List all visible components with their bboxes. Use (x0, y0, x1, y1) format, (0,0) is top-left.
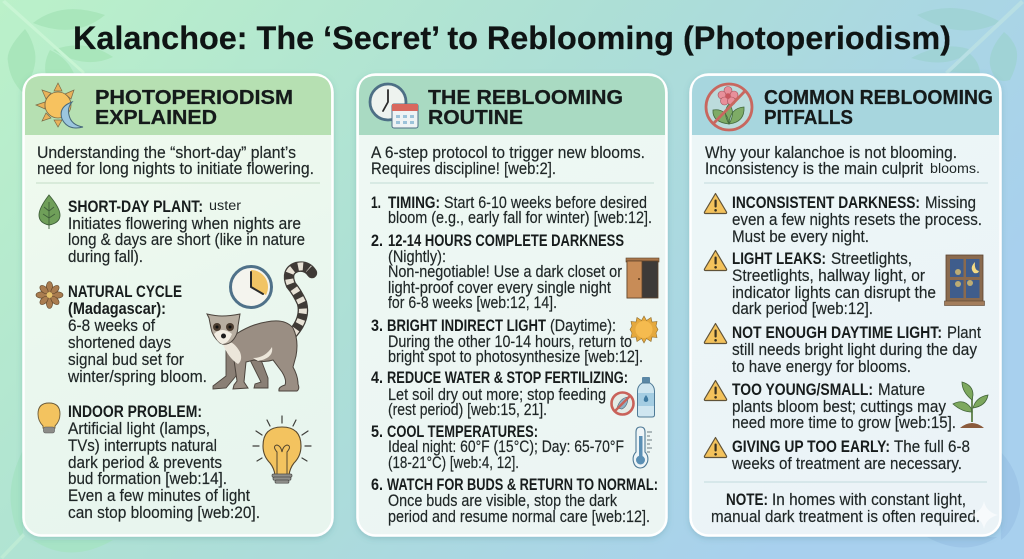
indoor problem text (68, 403, 260, 522)
icon: warning 5 (704, 438, 727, 458)
indoor problem text: Even a few minutes of light (68, 487, 250, 505)
step 4: Let soil dry out more; stop feeding (388, 386, 606, 404)
step 2: for 6-8 weeks [web:12, 14]. (388, 294, 557, 312)
natural cycle text: shortened days (68, 334, 171, 352)
step 3 (371, 317, 643, 366)
step 3: During the other 10-14 hours, return to (388, 333, 632, 351)
intro text: blooms. (930, 161, 980, 176)
pitfall: inconsistent darkness: Missing (925, 194, 976, 212)
pitfall: light leaks: dark period [web:12]. (732, 300, 873, 318)
step 1: bloom (e.g., early fall for winter) [web:12]. (388, 209, 652, 227)
intro text (705, 144, 980, 178)
step 6: 6. (371, 476, 383, 494)
icon: small light bulb (38, 403, 60, 433)
panel header band (25, 76, 331, 135)
short-day plant text (68, 198, 305, 266)
icon: leaf (39, 195, 60, 229)
sparkle mark (970, 501, 998, 529)
heading: PHOTOPERIODISM (95, 86, 293, 109)
pitfall: not enough daytime light: NOT ENOUGH DAYTIME LIGHT: (732, 324, 942, 342)
intro text: Inconsistency is the main culprit (705, 160, 923, 178)
step 5: 5. (371, 423, 383, 441)
heading (428, 86, 623, 129)
intro text (371, 144, 645, 178)
natural cycle text: signal bud set for (68, 351, 184, 369)
heading: ROUTINE (428, 106, 523, 129)
step 6 (371, 476, 658, 526)
pitfall: not enough daytime light: to have energy for blooms. (732, 358, 911, 376)
intro text: A 6-step protocol to trigger new blooms. (371, 144, 645, 162)
pitfall: too young or small: plants bloom best; cuttings may (732, 398, 947, 416)
intro text: Requires discipline! [web:2]. (371, 160, 556, 178)
pitfall: giving up too early (731, 438, 970, 473)
pitfall: too young or small (732, 381, 956, 432)
step 6: Once buds are visible, stop the dark (388, 492, 618, 510)
indoor problem text: TVs) interrupts natural (68, 437, 217, 455)
natural cycle text: winter/spring bloom. (67, 368, 207, 386)
heading (95, 86, 293, 129)
pitfall: inconsistent darkness: even a few nights resets the process. (732, 211, 982, 229)
short-day plant text: during fall). (68, 248, 143, 266)
icon: clock (230, 266, 272, 308)
pitfall: light leaks: indicator lights can disrupt the (732, 284, 936, 302)
note: NOTE: (726, 491, 768, 509)
icon: thermometer (633, 427, 652, 468)
step 3: BRIGHT INDIRECT LIGHT (387, 317, 546, 335)
indoor problem text: Artificial light (lamps, (68, 420, 210, 438)
icon: warning 1 (704, 194, 727, 214)
heading: COMMON REBLOOMING (764, 86, 993, 109)
panel header band (359, 76, 665, 135)
icon: large light bulb (253, 416, 311, 483)
pitfall: too young or small: Mature (878, 381, 925, 399)
panel: common reblooming pitfalls (690, 74, 1000, 536)
icon: seedling (953, 382, 988, 428)
heading: THE REBLOOMING (428, 86, 623, 109)
pitfall: too young or small: need more time to grow [web:15]. (732, 414, 956, 432)
natural cycle text: 6-8 weeks of (68, 317, 155, 335)
background leaves bottom left (0, 450, 113, 559)
note: In homes with constant light, (772, 491, 966, 509)
step 6: period and resume normal care [web:12]. (388, 508, 650, 526)
natural cycle text (67, 283, 207, 386)
icon: warning 4 (704, 380, 727, 400)
step 1 (371, 194, 652, 227)
step 6: WATCH FOR BUDS & RETURN TO NORMAL: (387, 476, 658, 494)
background leaves top left (2, 0, 113, 92)
pitfall: not enough daytime light: still needs bright light during the day (732, 341, 978, 359)
step 2: (Nightly): (388, 248, 446, 266)
short-day plant text: uster (209, 198, 242, 213)
icon: clock and calendar (370, 84, 418, 128)
indoor problem text: can stop blooming [web:20]. (68, 504, 260, 522)
icon: closet door (626, 258, 659, 298)
icon: warning 2 (704, 250, 727, 270)
illustration: lemur (207, 266, 312, 391)
step 4: 4. (371, 369, 383, 387)
step 5 (371, 423, 624, 472)
indoor problem text: dark period & prevents (68, 454, 222, 472)
step 3: 3. (371, 317, 383, 335)
pitfall: giving up too early: GIVING UP TOO EARLY: (732, 438, 890, 456)
pitfall: light leaks (732, 250, 936, 318)
step 5: COOL TEMPERATURES: (387, 423, 538, 441)
note (711, 491, 980, 526)
pitfall: light leaks: Streetlights, (831, 250, 912, 268)
step 4: (rest period) [web:15, 21]. (388, 401, 547, 419)
short-day plant text: SHORT-DAY PLANT: (68, 198, 203, 216)
background leaves top right (911, 0, 1024, 81)
natural cycle text: NATURAL CYCLE (68, 283, 182, 301)
pitfall: light leaks: Streetlights, hallway light, or (732, 267, 925, 285)
panel header band (692, 76, 999, 135)
step 3: bright spot to photosynthesize [web:12]. (388, 348, 643, 366)
icon: sun (630, 316, 658, 343)
short-day plant text: Initiates flowering when nights are (68, 215, 301, 233)
heading: EXPLAINED (95, 106, 217, 129)
step 4: REDUCE WATER & STOP FERTILIZING: (387, 369, 628, 387)
pitfall: giving up too early: weeks of treatment are necessary. (731, 455, 962, 473)
step 2: Non-negotiable! Use a dark closet or (388, 263, 622, 281)
pitfall: light leaks: LIGHT LEAKS: (732, 250, 826, 268)
short-day plant text: long & days are short (like in nature (68, 231, 305, 249)
icon: warning 3 (704, 324, 727, 344)
intro text: Understanding the “short-day” plant’s (37, 144, 296, 162)
step 2: light-proof cover every single night (388, 279, 611, 297)
step 1: TIMING: (388, 194, 440, 212)
indoor problem text: INDOOR PROBLEM: (68, 403, 202, 421)
step 2: 12-14 HOURS COMPLETE DARKNESS (388, 232, 624, 250)
step 1: 1. (371, 194, 381, 212)
pitfall: giving up too early: The full 6-8 (894, 438, 970, 456)
intro text: Why your kalanchoe is not blooming. (705, 144, 957, 162)
step 5: (18-21°C) [web:4, 12]. (388, 454, 519, 472)
pitfall: inconsistent darkness (732, 194, 982, 246)
background leaves bottom right (927, 452, 1020, 548)
heading: PITFALLS (764, 106, 853, 129)
pitfall: not enough daytime light (732, 324, 981, 376)
panel: the reblooming routine (358, 74, 666, 536)
step 2 (371, 232, 624, 312)
step 1: Start 6-10 weeks before desired (444, 194, 647, 212)
step 4 (371, 369, 628, 419)
step 3: (Daytime): (550, 317, 616, 335)
icon: no flower (706, 84, 752, 130)
indoor problem text: bud formation [web:14]. (68, 470, 227, 488)
step 5: Ideal night: 60°F (15°C); Day: 65-70°F (388, 438, 624, 456)
pitfall: not enough daytime light: Plant (947, 324, 981, 342)
icon: sun and moon (36, 83, 83, 128)
intro text: need for long nights to initiate flowering. (37, 160, 314, 178)
pitfall: inconsistent darkness: INCONSISTENT DARKNESS: (732, 194, 920, 212)
natural cycle text: (Madagascar): (68, 300, 166, 318)
pitfall: inconsistent darkness: Must be every night. (732, 228, 869, 246)
icon: no fertilizer and water bottle (612, 377, 654, 417)
intro text (37, 144, 314, 178)
step 2: 2. (371, 232, 383, 250)
note: manual dark treatment is often required. (711, 508, 980, 526)
heading (764, 86, 993, 129)
icon: flower (36, 282, 63, 308)
icon: night window (944, 255, 984, 306)
pitfall: too young or small: TOO YOUNG/SMALL: (732, 381, 873, 399)
title: Kalanchoe: The ‘Secret’ to Reblooming (Photoperiodism) (73, 20, 951, 56)
panel: photoperiodism explained (24, 74, 332, 536)
